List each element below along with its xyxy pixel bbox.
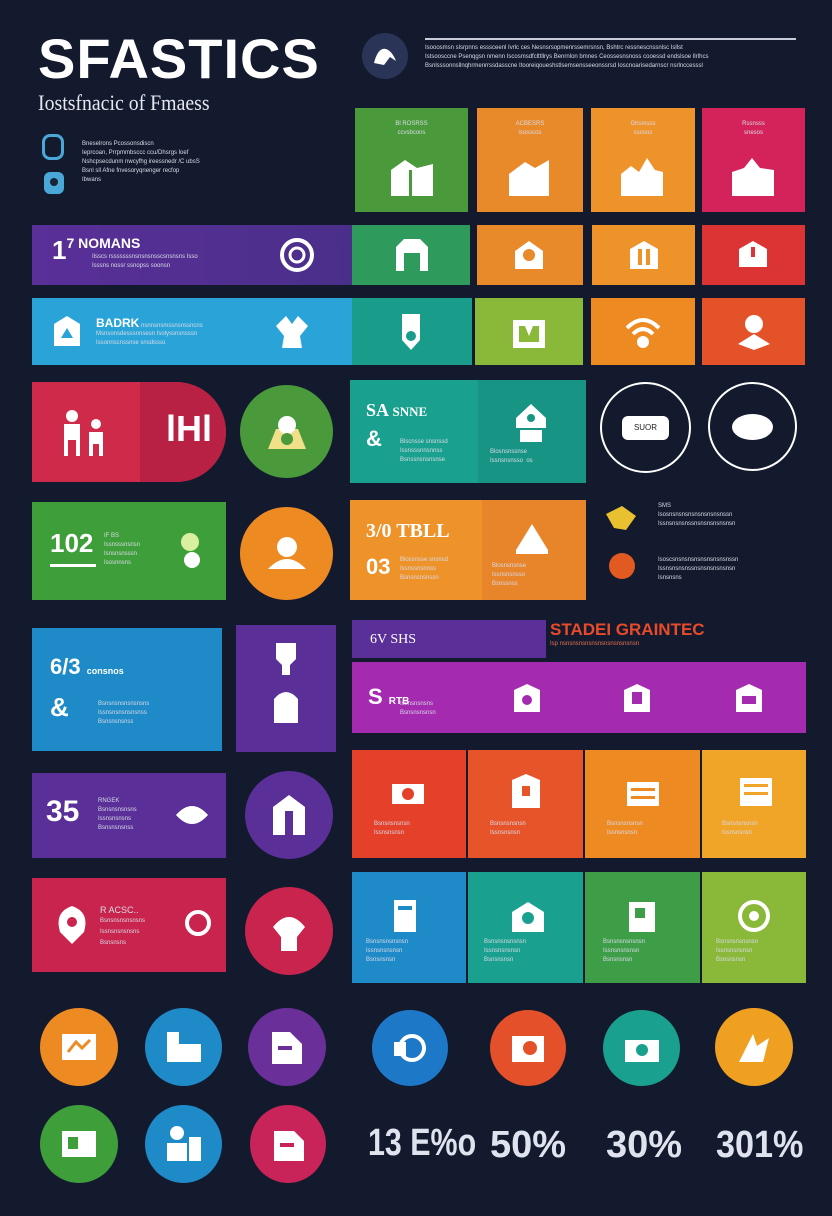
banner: purple [32, 225, 352, 285]
tiles row 1: ccvsbcons [397, 130, 426, 136]
magenta bar: Bsnsnsnsnsn [400, 710, 436, 716]
icon: blue shield [44, 172, 64, 194]
title: SFASTICS [38, 27, 320, 90]
panel: orange: Bsnssnss [492, 581, 518, 587]
side notes with icons: Isnsnsns [658, 575, 682, 581]
panel: orange: 03 [366, 554, 390, 579]
text: Bsnsnsnsn [603, 957, 632, 963]
panel: crimson block [32, 382, 226, 482]
icon: blue badge [42, 134, 64, 160]
panel: orange: Issnsnsnsso [492, 572, 525, 578]
stat numbers: 13 E%o [368, 1122, 476, 1164]
icons: outline circles: SUOR [634, 423, 657, 432]
top right text block: Isooosmsn slsrpnns esssceenl Ivrlc ces Nesnsrsopmenrssemrsnsn, Bshtrc ressnescnssnlsc Isllst [425, 45, 683, 51]
tiles row: warm: Issnsnsnsn [374, 830, 404, 836]
banner: cyan: Msnsonsdesssnnsesn Isolyssnsnsssn [96, 331, 197, 337]
panel: orange: 3/0 TBLL [366, 520, 450, 542]
panel: purple: Issnsnsnsns [98, 816, 131, 822]
intro text: Nshcpsecdunm nwcyfhg ireessnedr /C ubsS [82, 159, 200, 165]
top right text block: Bsnlsssonnsllnqhrmenrrssdasscne Itooreiqoueshstlsemsensseeonssrsd Ioscnoarisedarnscr nsrlnccesssl [425, 63, 703, 69]
text: 30% [606, 1124, 682, 1166]
text: ACBESRS [516, 121, 544, 127]
panel: teal: Issnsssnnsnnss [400, 448, 442, 454]
subtitle: Iostsfnacic of Fmaess [38, 90, 210, 115]
magenta bar [352, 662, 806, 733]
panel: teal: Blosnsnssnse [490, 449, 527, 455]
text: Bsnsnsnsnsn [607, 821, 643, 827]
panel: blue: Bsnsnsnsnsnsnsns [98, 701, 149, 707]
magenta bar: Issnsnsnsns [400, 701, 433, 707]
intro text: Bneselrons Pcossonsdiscn [82, 141, 154, 147]
icon circles row 2 [40, 1105, 118, 1183]
panel: blue [32, 628, 222, 751]
text: Issnsnsnsn [490, 830, 520, 836]
top right text block: Istsoosccne Psenqgsn nmenn Iscosmsdfclttllrys Benrnlon bmnes Ceossesnsnoss cooessd endslsoe lIrlhcs [425, 54, 708, 60]
banner: cyan [32, 298, 352, 365]
header bar: 6V SHS [370, 632, 416, 647]
panel: green: Isosnnsns [104, 560, 131, 566]
top right text block [425, 38, 796, 69]
icon circle: orange [240, 507, 333, 600]
panel: green [32, 502, 226, 600]
text: Bsnsnsnsnsnsn [716, 939, 758, 945]
panel: purple tall [236, 625, 336, 752]
banner: cyan: BADRK nsnnsnsmssnsnssncns [96, 316, 203, 330]
intro block [42, 134, 200, 194]
panel: crimson: Bsnsnsns [100, 940, 126, 946]
tiles row 1 [355, 108, 468, 212]
tiles row: cool: Issnsnsnsnsn [366, 948, 402, 954]
text: Bsnsnsnsnsn [722, 821, 758, 827]
intro text: Bsnl sll Afne fnvesoryqnenger recfop [82, 168, 179, 174]
red heading: Isp nsnsnsnsnsnsnsnsnsnsnsnsn [550, 641, 639, 647]
panel: green: Isnsnsnsssn [104, 551, 137, 557]
side notes with icons [606, 502, 738, 581]
header bar [352, 620, 546, 658]
tiles row: cool [352, 872, 466, 983]
panel: teal: Blscnsse snsnssd [400, 439, 448, 445]
text: Bsnsnsnsnsn [490, 821, 526, 827]
text: Bsnsnsnsn [716, 957, 745, 963]
intro text [82, 140, 200, 183]
tiles row 3 [352, 298, 472, 365]
side notes with icons: Isosnsnsnsnsnsnsnsnsnssn [658, 512, 732, 518]
panel: green: IF BS [104, 533, 119, 539]
text: snesos [744, 130, 763, 136]
text: Rssnsss [742, 121, 765, 127]
panel: orange [350, 500, 586, 600]
tiles row: cool: Bsnsnsnsn [366, 957, 395, 963]
side notes with icons: Issnsnsnsnssnsnsnsnsnsnsn [658, 566, 735, 572]
text: Issnsnsnsn [722, 830, 752, 836]
panel: purple [32, 773, 226, 858]
panel: crimson: Bsnsnsnsnsnsns [100, 918, 145, 924]
panel: crimson block: lHl [166, 408, 212, 449]
tiles row: warm [352, 750, 466, 858]
icon circle: green [240, 385, 333, 478]
tiles row 1: Bl ROSRSS [395, 121, 428, 127]
banner: purple: 17 NOMANS [52, 235, 140, 265]
banner: cyan: Issonnscnssnse snsdssso [96, 340, 165, 346]
panel: purple: Bsnsnsnsnsns [98, 807, 137, 813]
panel: green: 102 [50, 528, 93, 558]
panel: teal: & [366, 426, 382, 451]
text: lsosscos [518, 130, 542, 136]
icon: top circle [362, 33, 408, 79]
panel: teal: Issnsnsnsso os [490, 458, 533, 464]
panel: teal [350, 380, 586, 483]
text: ssosos [634, 130, 652, 136]
panel: blue: 6/3 consnos [50, 654, 124, 679]
panel: orange: Blossnsse snsnsd [400, 557, 448, 563]
icons: outline circles [600, 382, 691, 473]
panel: crimson: Issnsnsnsnsns [100, 929, 139, 935]
red heading: STADEI GRAINTEC [550, 620, 705, 639]
panel: green: Issnsssnsnsn [104, 542, 140, 548]
text: 301% [716, 1124, 803, 1166]
text: Issnsnsnsnsn [716, 948, 752, 954]
text: 50% [490, 1124, 566, 1166]
tiles row 2 [352, 225, 470, 285]
panel: purple: 35 [46, 795, 79, 828]
panel: purple: RNGEK [98, 798, 119, 804]
icon circle: purple [245, 771, 333, 859]
panel: orange: Blosnsnsnse [492, 563, 526, 569]
panel: blue: Issnsnsnsnsnsnss [98, 710, 147, 716]
panel: orange: Bsnsnsnsnssn [400, 575, 439, 581]
panel: teal: Bsnssnsnsnsnse [400, 457, 445, 463]
text: Issnsnsnsn [607, 830, 637, 836]
icon circles row 1 [40, 1008, 118, 1086]
panel: blue: & [50, 692, 69, 722]
tiles row: cool: Bsnsnsnsnsnsn [366, 939, 408, 945]
side notes with icons: SMS [658, 503, 671, 509]
tiles row: warm: Bsnsnsnsnsn [374, 821, 410, 827]
magenta bar: S RTB [368, 684, 409, 709]
intro text: Ieprcoan, Prrpmmbsccc ccu/Dhsrgs loef [82, 150, 188, 156]
text: Ghsmsss [630, 121, 656, 127]
text: Issnsnsnsnsn [484, 948, 520, 954]
panel: purple: Bsnsnsnsnss [98, 825, 133, 831]
banner: purple: Ilsscs rsssssssnsnsnsnsscsnsnsns Isso [92, 254, 198, 260]
panel: orange: Issnssnsnnss [400, 566, 436, 572]
panel: teal: SA SNNE [366, 400, 427, 420]
intro text: Ibwans [82, 177, 101, 183]
panel: blue: Bsnsnsnsnss [98, 719, 133, 725]
banner: purple: Isssns nossr ssnopss soonsn [92, 263, 170, 269]
text: Bsnsnsnsnsnsn [603, 939, 645, 945]
side notes with icons: Issnsnsnsnssnsnsnsnsnsnsn [658, 521, 735, 527]
icon circle: crimson [245, 887, 333, 975]
side notes with icons: Isoscsnsnsnsnsnsnsnsnsnssn [658, 557, 738, 563]
text: Issnsnsnsnsn [603, 948, 639, 954]
text: Bsnsnsnsnsnsn [484, 939, 526, 945]
panel: crimson [32, 878, 226, 972]
text: Bsnsnsnsn [484, 957, 513, 963]
